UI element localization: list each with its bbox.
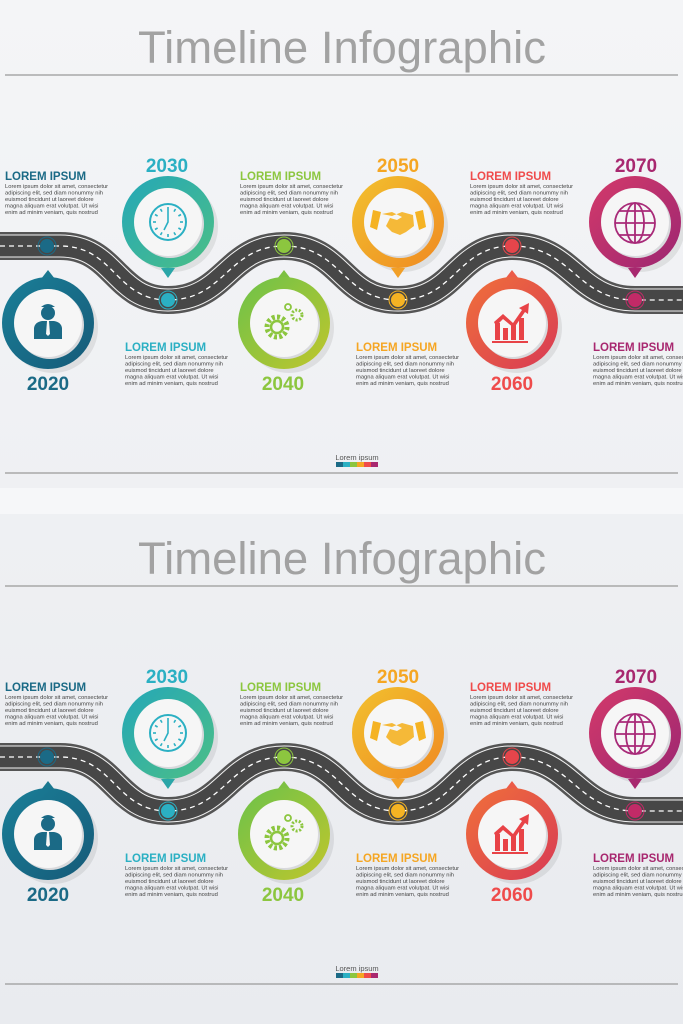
text block: 2060: LOREM IPSUM bbox=[470, 171, 551, 183]
text block: 2030: Lorem ipsum dolor sit amet, consectetur bbox=[125, 355, 228, 361]
text block: top left: magna aliquam erat volutpat. Ut wisi bbox=[5, 204, 98, 210]
milestone 2050 bbox=[352, 156, 448, 278]
milestone 2050: 2050 bbox=[377, 156, 419, 177]
text block: top left: Lorem ipsum dolor sit amet, consectetur bbox=[5, 184, 108, 190]
text block: 2050: Lorem ipsum dolor sit amet, consectetur bbox=[356, 355, 459, 361]
milestone 2040 bbox=[238, 270, 334, 395]
text block: 2060: enim ad minim veniam, quis nostrud bbox=[470, 210, 563, 216]
text block: 2040: magna aliquam erat volutpat. Ut wisi bbox=[240, 204, 333, 210]
text block: 2060: magna aliquam erat volutpat. Ut wisi bbox=[470, 204, 563, 210]
text block: 2060 bbox=[470, 171, 573, 216]
title: Timeline Infographic bbox=[138, 22, 546, 73]
road markers bbox=[38, 237, 644, 309]
footer logo: Lorem ipsum bbox=[335, 453, 379, 462]
text block: 2030 bbox=[125, 342, 228, 387]
text block: 2030: LOREM IPSUM bbox=[125, 342, 206, 354]
text block: 2040 bbox=[240, 171, 343, 216]
text block: 2060: adipiscing elit, sed diam nonummy nih bbox=[470, 190, 568, 196]
milestone 2040: 2040 bbox=[262, 374, 304, 395]
milestone 2030 bbox=[122, 156, 218, 278]
text block: top left: LOREM IPSUM bbox=[5, 171, 86, 183]
text block: top left: euismod tincidunt ut laoreet dolore bbox=[5, 197, 94, 203]
text block: 2070: LOREM IPSUM bbox=[593, 342, 674, 354]
milestone 2060: 2060 bbox=[491, 374, 533, 395]
text block: 2050: magna aliquam erat volutpat. Ut wisi bbox=[356, 374, 449, 380]
text block: top left: adipiscing elit, sed diam nonummy nih bbox=[5, 190, 103, 196]
text block: 2050: adipiscing elit, sed diam nonummy nih bbox=[356, 362, 454, 368]
milestone 2020 bbox=[2, 270, 98, 395]
text block: top left: enim ad minim veniam, quis nostrud bbox=[5, 210, 98, 216]
footer logo bbox=[335, 453, 379, 467]
text block: 2040: enim ad minim veniam, quis nostrud bbox=[240, 210, 333, 216]
text block: 2050: euismod tincidunt ut laoreet dolore bbox=[356, 368, 445, 374]
milestone 2070: 2070 bbox=[615, 156, 657, 177]
text block: 2050: LOREM IPSUM bbox=[356, 342, 437, 354]
panel: top timeline bbox=[0, 22, 683, 473]
milestone 2030: 2030 bbox=[146, 156, 188, 177]
text block: top left bbox=[5, 171, 108, 216]
milestone 2020: 2020 bbox=[27, 374, 69, 395]
road bbox=[0, 246, 683, 300]
text block: 2040: Lorem ipsum dolor sit amet, consectetur bbox=[240, 184, 343, 190]
milestone 2060 bbox=[466, 270, 562, 395]
text block: 2030: magna aliquam erat volutpat. Ut wisi bbox=[125, 374, 218, 380]
text block: 2050: enim ad minim veniam, quis nostrud bbox=[356, 381, 449, 387]
text block: 2060: euismod tincidunt ut laoreet dolore bbox=[470, 197, 559, 203]
text block: 2030: adipiscing elit, sed diam nonummy nih bbox=[125, 362, 223, 368]
panel: bottom timeline (repeat) bbox=[0, 533, 683, 984]
text block: 2050 bbox=[356, 342, 459, 387]
text block: 2070 bbox=[593, 342, 683, 387]
text block: 2030: enim ad minim veniam, quis nostrud bbox=[125, 381, 218, 387]
text block: 2040: euismod tincidunt ut laoreet dolore bbox=[240, 197, 329, 203]
text block: 2070: euismod tincidunt ut laoreet dolore bbox=[593, 368, 682, 374]
text block: 2040: LOREM IPSUM bbox=[240, 171, 321, 183]
text block: 2040: adipiscing elit, sed diam nonummy nih bbox=[240, 190, 338, 196]
text block: 2030: euismod tincidunt ut laoreet dolore bbox=[125, 368, 214, 374]
text block: 2060: Lorem ipsum dolor sit amet, consectetur bbox=[470, 184, 573, 190]
milestone 2070 bbox=[589, 156, 683, 278]
